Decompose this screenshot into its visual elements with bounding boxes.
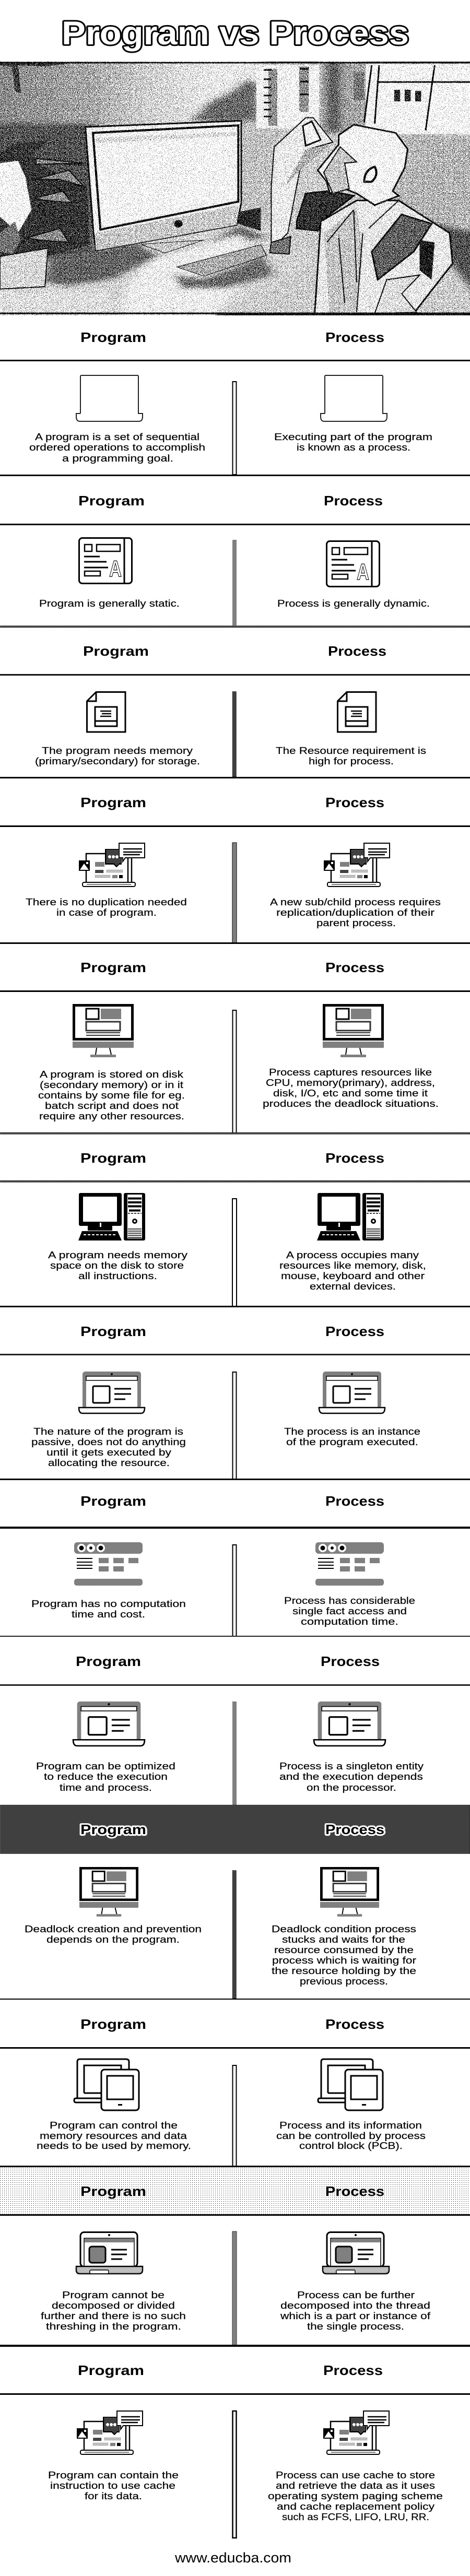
- rule: [0, 2166, 470, 2167]
- icon: laptop: [319, 1372, 385, 1413]
- divider: [232, 540, 237, 626]
- text: program duplication: in case of program.: [56, 907, 157, 918]
- text: process instance: of the program executed.: [286, 1437, 418, 1447]
- text: process deadlock: the resource holding by the: [272, 1966, 416, 1976]
- dotted header band: [0, 2167, 470, 2214]
- divider: [232, 1870, 237, 1999]
- text: process duplication: replication/duplication of their: [276, 907, 434, 918]
- text: process deadlock: previous process.: [300, 1976, 388, 1987]
- heading: process: Process: [328, 643, 386, 659]
- text: program passive: until it gets executed by: [46, 1447, 171, 1458]
- panel: row 10: [0, 1868, 470, 2000]
- panel: row 2: [0, 493, 470, 628]
- text: process definition: [274, 432, 432, 453]
- heading: program: Program: [76, 1653, 141, 1669]
- icon: laptop outline: [321, 375, 387, 421]
- heading: program: Program: [80, 1822, 146, 1837]
- text: process resources: disk, I/O, etc and some time it: [273, 1088, 428, 1098]
- text: program disk: A program is stored on disk: [40, 1069, 184, 1080]
- text: program decomposition: Program cannot be: [62, 2290, 164, 2300]
- heading: program: Program: [80, 1150, 146, 1166]
- icon: laptop and tablet: [318, 2059, 383, 2110]
- text: process deadlock: Deadlock condition process: [272, 1924, 416, 1934]
- text: program storage: (primary/secondary) for storage.: [35, 756, 200, 766]
- text: process cache: such as FCFS, LIFO, LRU, RR.: [282, 2512, 429, 2522]
- heading: process: Process: [323, 2362, 383, 2378]
- rule: [0, 1180, 470, 1183]
- panel: row 7: [0, 1324, 470, 1480]
- text: program memory: [48, 1250, 187, 1281]
- text: process decomposition: [280, 2290, 431, 2332]
- text: program memory: space on the disk to store: [50, 1260, 184, 1271]
- text: process control block: can be controlled by process: [276, 2131, 426, 2141]
- heading: process: Process: [325, 1822, 384, 1837]
- panel: row 8: [0, 1493, 470, 1637]
- text: program storage: [35, 746, 200, 766]
- rule: [0, 524, 470, 525]
- text: process cache: and retrieve the data as it uses: [276, 2480, 435, 2491]
- rule: [0, 1527, 470, 1529]
- text: process resources: [276, 746, 426, 766]
- icon: laptop with chat: [79, 843, 145, 887]
- heading: program: Program: [80, 2016, 146, 2032]
- icon: card: [79, 538, 132, 584]
- text: process computation: [284, 1596, 415, 1627]
- icon: laptop with keyboard: [76, 2232, 143, 2274]
- icon: imac: [79, 1868, 138, 1917]
- rule: [0, 2047, 470, 2049]
- text: process resources: CPU, memory(primary), address,: [266, 1078, 435, 1088]
- footer url: www.educba.com: [174, 2550, 291, 2566]
- text: process deadlock: resource consumed by the: [274, 1945, 414, 1955]
- text: process devices: A process occupies many: [286, 1250, 419, 1260]
- icon: imac: [320, 1868, 379, 1917]
- divider: [232, 691, 237, 777]
- panel: row 3: [0, 643, 470, 778]
- text: program memory control: [37, 2120, 191, 2151]
- icon: laptop with keyboard: [323, 2232, 389, 2274]
- text: process computation: Process has considerable: [284, 1596, 415, 1606]
- rule: [0, 1306, 470, 1307]
- rule: [0, 825, 470, 827]
- panel: row 4: [0, 795, 470, 944]
- text: process cache: and cache replacement policy: [277, 2501, 434, 2512]
- panel: row 13: [0, 2362, 470, 2538]
- text: program definition: ordered operations to accomplish: [29, 442, 205, 453]
- text: program decomposition: [41, 2290, 186, 2332]
- text: program disk: batch script and does not: [45, 1101, 179, 1111]
- text: program disk: (secondary memory) or in it: [40, 1080, 183, 1090]
- icon: web page: [315, 1542, 384, 1586]
- text: process singleton: [279, 1761, 424, 1793]
- heading: process: Process: [324, 493, 383, 509]
- heading: process: Process: [325, 329, 384, 345]
- text: program passive: passive, does not do anything: [31, 1437, 186, 1447]
- text: process deadlock: [272, 1924, 416, 1987]
- heading: process: Process: [325, 2016, 384, 2032]
- icon: laptop outline: [76, 375, 143, 421]
- text: process resources: [263, 1067, 439, 1109]
- text: program optimized: Program can be optimized: [36, 1761, 175, 1771]
- text: process decomposition: the single process.: [307, 2321, 404, 2332]
- title: Program vs Process: [62, 15, 409, 52]
- rule: [0, 2214, 470, 2216]
- panel: row 9: [0, 1653, 470, 1805]
- heading: process: Process: [325, 2183, 384, 2199]
- heading: program: Program: [80, 329, 146, 345]
- text: program duplication: There is no duplication needed: [26, 897, 187, 907]
- text: process singleton: on the processor.: [307, 1782, 396, 1793]
- rule: [0, 475, 470, 476]
- rule: [0, 942, 470, 944]
- text: process cache: operating system paging scheme: [268, 2491, 443, 2501]
- text: process instance: The process is an instance: [284, 1426, 420, 1437]
- text: process resources: produces the deadlock situations.: [263, 1098, 439, 1109]
- icon: laptop with chat: [323, 2411, 389, 2454]
- hero photo: person working at desktop computer: [0, 54, 470, 322]
- icon: document: [337, 692, 376, 732]
- text: process dynamic: Process is generally dynamic.: [277, 598, 430, 609]
- icon: desktop pc: [317, 1193, 384, 1240]
- icon: imac: [323, 1006, 384, 1057]
- rule: [0, 2345, 470, 2347]
- band background: [0, 1805, 470, 1854]
- rule: [0, 1132, 470, 1135]
- text: process devices: [279, 1250, 426, 1292]
- text: process cache: Process can use cache to store: [276, 2470, 435, 2480]
- heading: program: Program: [80, 1493, 146, 1509]
- text: program memory control: memory resources and data: [40, 2131, 187, 2141]
- text: process devices: mouse, keyboard and other: [281, 1271, 425, 1281]
- rule: [0, 1479, 470, 1480]
- text: program optimized: to reduce the execution: [44, 1771, 168, 1782]
- panel: row 5: [0, 960, 470, 1135]
- rule: [0, 1684, 470, 1686]
- text: process singleton: Process is a singleton entity: [279, 1761, 424, 1771]
- text: program memory: A program needs memory: [48, 1250, 187, 1260]
- text: process devices: resources like memory, disk,: [279, 1260, 426, 1271]
- panel: dark header band: [0, 1805, 470, 1854]
- icon: laptop with chat: [77, 2411, 143, 2454]
- icon: document: [87, 692, 125, 732]
- text: process cache: [268, 2470, 443, 2522]
- divider: [233, 382, 236, 475]
- text: program passive: [31, 1426, 186, 1468]
- heading: program: Program: [80, 1324, 146, 1339]
- text: process control block: [276, 2120, 426, 2151]
- heading: program: Program: [80, 2183, 146, 2199]
- rule: [0, 360, 470, 361]
- text: program deadlock: Deadlock creation and prevention: [25, 1924, 202, 1934]
- panel: row 1 start / end: [0, 329, 470, 476]
- rule: [0, 625, 470, 628]
- heading: process: Process: [325, 795, 384, 810]
- text: program memory control: needs to be used by memory.: [37, 2141, 191, 2151]
- divider: [233, 1372, 236, 1479]
- text: program duplication: [26, 897, 187, 918]
- divider: [232, 843, 237, 943]
- icon: desktop pc: [78, 1193, 145, 1240]
- text: process control block: control block (PCB).: [299, 2141, 403, 2151]
- text: program disk: contains by some file for eg.: [38, 1090, 185, 1101]
- text: program definition: [29, 432, 205, 464]
- text: program decomposition: further and there is no such: [41, 2311, 186, 2321]
- text: process decomposition: decomposed into the thread: [280, 2300, 430, 2311]
- text: program disk: require any other resources.: [39, 1111, 184, 1121]
- text: program cache: for its data.: [85, 2491, 142, 2501]
- rule: [0, 990, 470, 992]
- heading: process: Process: [325, 1324, 384, 1339]
- text: program passive: The nature of the program is: [33, 1426, 183, 1437]
- icon: laptop with chat: [324, 843, 390, 887]
- text: program passive: allocating the resource.: [48, 1458, 170, 1468]
- text: program definition: A program is a set of sequential: [35, 432, 199, 442]
- panel: row 11: [0, 2016, 470, 2167]
- text: program cache: [48, 2470, 179, 2501]
- icon: imac: [73, 1006, 134, 1057]
- icon: web page: [74, 1542, 143, 1586]
- text: program cache: instruction to use cache: [50, 2480, 175, 2491]
- divider: [233, 1010, 236, 1133]
- text: process duplication: [270, 897, 441, 928]
- text: process computation: computation time.: [301, 1616, 398, 1627]
- text: process duplication: A new sub/child process requires: [270, 897, 441, 907]
- text: program computation: [31, 1599, 186, 1620]
- panel: row 6: [0, 1150, 470, 1307]
- text: program memory: all instructions.: [78, 1271, 157, 1281]
- text: program decomposition: threshing in the program.: [46, 2321, 181, 2332]
- icon: card: [327, 541, 379, 587]
- panel: row 12: [0, 2167, 470, 2347]
- text: program computation: Program has no computation: [31, 1599, 186, 1609]
- rule: [0, 1999, 470, 2000]
- text: program storage: The program needs memory: [42, 746, 193, 756]
- text: program deadlock: [25, 1924, 202, 1945]
- icon: laptop and tablet: [74, 2059, 139, 2110]
- text: process definition: is known as a process.: [297, 442, 410, 453]
- divider: [232, 2231, 237, 2346]
- heading: process: Process: [321, 1653, 380, 1669]
- icon: laptop: [73, 1701, 145, 1746]
- text: program computation: time and cost.: [72, 1609, 145, 1620]
- icon: laptop: [314, 1701, 385, 1746]
- text: process deadlock: stucks and waits for the: [282, 1934, 405, 1945]
- divider: [233, 2065, 236, 2166]
- divider: [232, 1199, 237, 1306]
- text: program decomposition: decomposed or divided: [52, 2300, 175, 2311]
- heading: process: Process: [325, 1150, 384, 1166]
- heading: program: Program: [83, 643, 149, 659]
- divider: [233, 2411, 236, 2538]
- text: process deadlock: process which is waiting for: [272, 1955, 416, 1966]
- rule: [0, 674, 470, 676]
- heading: program: Program: [78, 493, 145, 509]
- divider: [233, 1545, 236, 1636]
- text: program optimized: time and process.: [60, 1782, 152, 1793]
- text: process duplication: parent process.: [316, 918, 396, 928]
- text: program static: Program is generally static.: [39, 598, 180, 609]
- text: process control block: Process and its information: [279, 2120, 422, 2131]
- text: process definition: Executing part of the program: [274, 432, 432, 442]
- heading: process: Process: [325, 1493, 384, 1509]
- text: process decomposition: which is a part or instance of: [280, 2311, 431, 2321]
- text: process resources: Process captures resources like: [269, 1067, 432, 1078]
- text: program memory control: Program can control the: [50, 2120, 178, 2131]
- rule: [0, 1354, 470, 1355]
- text: program cache: Program can contain the: [48, 2470, 179, 2480]
- text: process resources: The Resource requirement is: [276, 746, 426, 756]
- text: process resources: high for process.: [309, 756, 394, 766]
- text: program deadlock: depends on the program.: [46, 1934, 180, 1945]
- rule: [0, 777, 470, 778]
- divider: [232, 1701, 237, 1805]
- text: process singleton: and the execution depends: [279, 1771, 423, 1782]
- text: process instance: [284, 1426, 420, 1447]
- heading: program: Program: [80, 960, 146, 975]
- text: program definition: a programming goal.: [62, 453, 173, 464]
- rule: [0, 1636, 470, 1637]
- heading: process: Process: [325, 960, 384, 975]
- heading: program: Program: [80, 795, 146, 810]
- icon: laptop: [79, 1372, 145, 1413]
- heading: program: Program: [78, 2362, 144, 2378]
- text: program disk: [38, 1069, 185, 1121]
- text: program optimized: [36, 1761, 175, 1793]
- text: process decomposition: Process can be further: [297, 2290, 415, 2300]
- text: process devices: external devices.: [310, 1281, 396, 1292]
- rule: [0, 2393, 470, 2395]
- text: process computation: single fact access and: [292, 1606, 407, 1616]
